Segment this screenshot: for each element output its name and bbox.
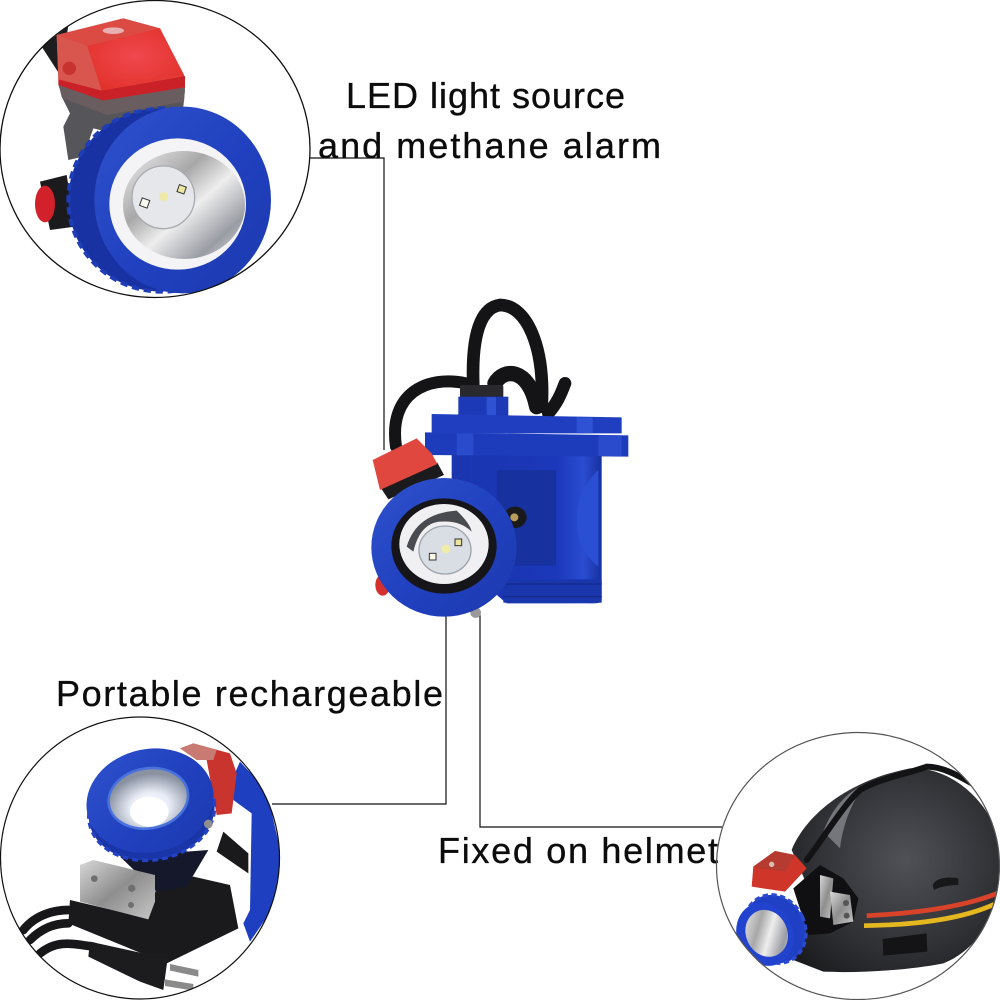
vent bbox=[933, 877, 958, 890]
cable bbox=[807, 767, 972, 860]
battery body bbox=[452, 455, 602, 603]
red alarm box bbox=[57, 18, 185, 100]
red stripe bbox=[867, 893, 997, 916]
lamp body bbox=[120, 850, 208, 892]
blue strap bbox=[233, 762, 282, 942]
blue front ring bbox=[94, 107, 271, 293]
cable connector bbox=[460, 385, 503, 398]
plug bbox=[88, 942, 168, 990]
black arm bbox=[217, 832, 248, 873]
battery inset label bbox=[497, 470, 556, 566]
reflector bbox=[107, 766, 190, 830]
central product: lamp and battery bbox=[371, 305, 628, 618]
battery neck bbox=[458, 397, 508, 417]
white reflector bbox=[399, 504, 489, 584]
helmet shell bbox=[792, 768, 999, 972]
circle outline bbox=[0, 717, 280, 999]
detail circle: lamp head with alarm bbox=[0, 0, 310, 298]
battery side recess bbox=[577, 470, 598, 567]
knurled ring bbox=[748, 893, 808, 965]
heading: portable rechargeable: Portable rechargeable bbox=[56, 673, 443, 714]
connector: LED light source bbox=[310, 158, 384, 450]
blue face bbox=[86, 748, 214, 853]
blue face bbox=[736, 903, 794, 966]
reflector bbox=[738, 903, 796, 964]
blue lamp ring bbox=[371, 478, 517, 617]
red button bbox=[40, 175, 75, 230]
knurled back ring bbox=[66, 106, 175, 294]
knurled ring bbox=[87, 792, 216, 862]
lower flange bbox=[425, 432, 628, 457]
plug pins bbox=[170, 964, 198, 977]
heading: and methane alarm: and methane alarm bbox=[318, 125, 661, 166]
LEDs bbox=[442, 545, 450, 553]
red alarm box bbox=[180, 743, 237, 815]
metal clip bbox=[820, 875, 833, 918]
yellow stripe bbox=[864, 904, 994, 926]
black inner ring bbox=[391, 498, 497, 594]
circle outline bbox=[716, 732, 1000, 1000]
upper flange bbox=[432, 414, 622, 433]
bright beam bbox=[130, 797, 169, 827]
handle tab bbox=[883, 933, 927, 956]
cables bbox=[23, 910, 93, 953]
LED disc bbox=[419, 526, 471, 574]
LEDs bbox=[159, 192, 168, 201]
lamp screw bbox=[470, 607, 481, 618]
heading: fixed on helmet: Fixed on helmet bbox=[438, 830, 718, 871]
red knob bbox=[375, 574, 390, 596]
black charger base bbox=[68, 877, 238, 963]
red alarm box bbox=[373, 438, 437, 490]
bolt bbox=[503, 507, 527, 528]
heading: LED light source: LED light source bbox=[346, 75, 625, 116]
clip mount bbox=[793, 865, 858, 935]
black cable stub bbox=[42, 26, 68, 75]
grey clip bracket bbox=[58, 83, 185, 160]
reflector bbox=[123, 151, 245, 259]
helmet highlight bbox=[823, 783, 867, 848]
LED disc bbox=[132, 166, 195, 229]
connector: portable rechargeable bbox=[272, 615, 446, 804]
circle outline bbox=[0, 0, 310, 298]
metal clip bbox=[80, 860, 155, 919]
screw bbox=[204, 820, 213, 828]
red alarm box bbox=[752, 851, 807, 892]
detail circle: charging on base bbox=[0, 717, 282, 999]
connector: fixed on helmet bbox=[480, 615, 722, 827]
white inner ring bbox=[109, 138, 246, 270]
lamp bracket bbox=[380, 463, 444, 499]
battery threads bbox=[503, 579, 602, 603]
detail circle: lamp on helmet bbox=[716, 732, 1000, 1000]
cables bbox=[395, 305, 565, 447]
